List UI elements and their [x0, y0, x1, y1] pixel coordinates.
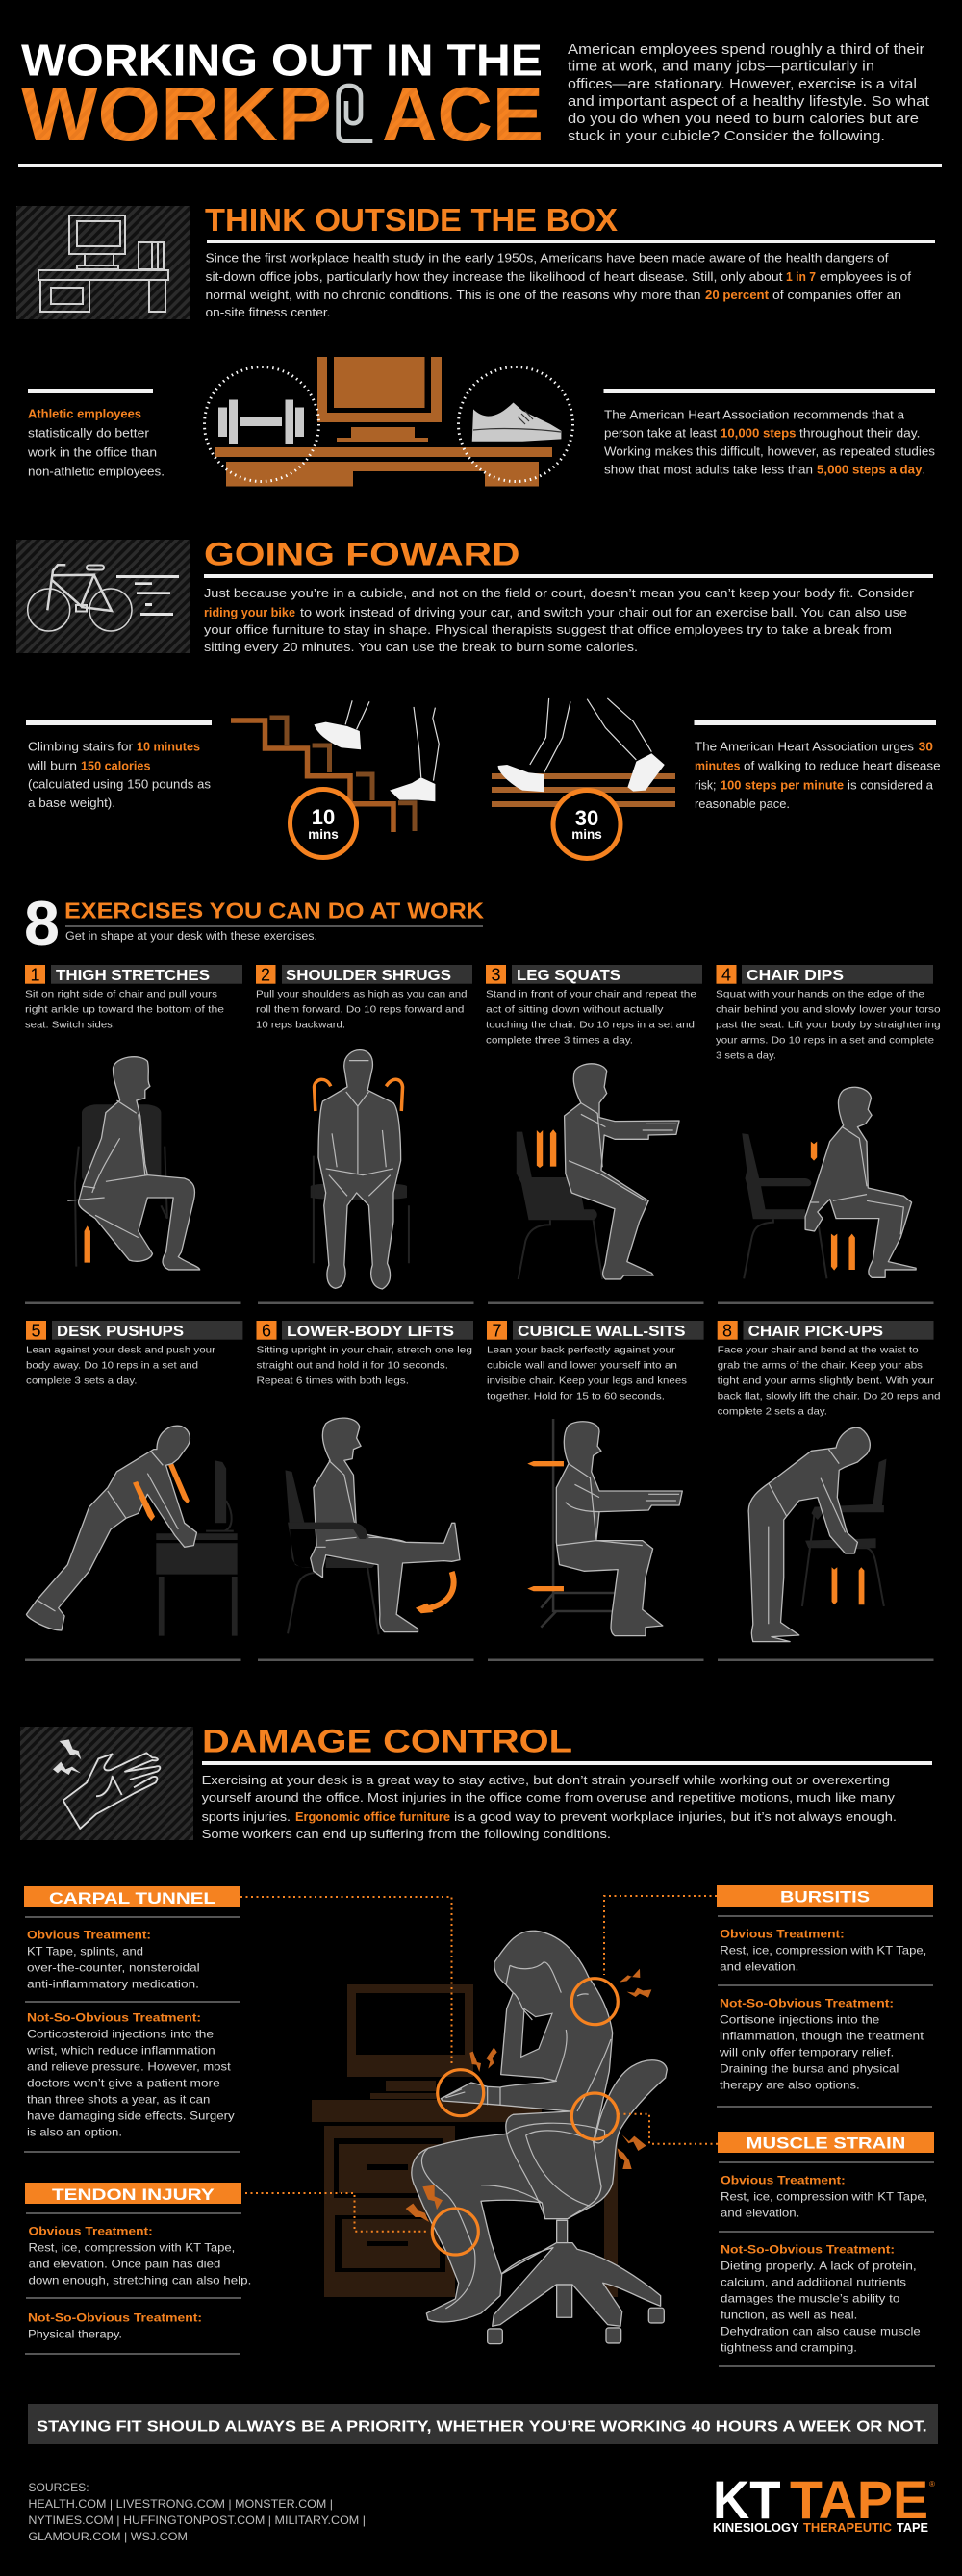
body text: Since the first workplace health study in the early 1950s, Americans have been made aware of the health dangers of — [206, 251, 889, 265]
callout: climbing stairs: 10 minutes — [137, 740, 200, 754]
exercise 5: desk pushups: body away. Do 10 reps in a set and — [26, 1360, 198, 1372]
callout: 10,000 steps: . — [922, 462, 925, 477]
badge: 30 mins: mins — [571, 827, 602, 842]
logo: KT Tape: THERAPEUTIC — [803, 2521, 892, 2535]
body text — [204, 586, 915, 654]
body text: Ergonomic office furniture — [295, 1809, 450, 1824]
panel: bursitis: Cortisone injections into the — [720, 2013, 880, 2027]
body text: yourself around the office. Most injuries in the office come from overuse and repetitive motions, much like many — [202, 1790, 896, 1805]
section: think outside the box — [16, 202, 935, 319]
panel: bursitis: Rest, ice, compression with KT Tape, — [720, 1944, 926, 1957]
sources: HEALTH.COM | LIVESTRONG.COM | MONSTER.COM | — [28, 2497, 333, 2511]
body text: your office furniture to stay in shape. Physical therapists suggest that office employees try to take a break from — [204, 622, 892, 637]
exercise 7: cubicle wall-sits: CUBICLE WALL-SITS — [518, 1324, 685, 1340]
icon: sneaker — [458, 367, 573, 481]
panel: tendon injury: down enough, stretching can also help. — [29, 2274, 251, 2287]
exercise 6: lower-body lifts: 6 — [262, 1322, 271, 1341]
body text: Some workers can end up suffering from the following conditions. — [202, 1827, 611, 1841]
callout: 10,000 steps: The American Heart Association recommends that a — [604, 408, 905, 422]
exercise 3: leg squats — [486, 965, 702, 1279]
panel: carpal tunnel: have damaging side effects. Surgery — [27, 2109, 235, 2123]
introduction paragraph: offices—are stationary. However, exercise is a vital — [568, 76, 917, 92]
figure: shoulder shrug — [311, 1050, 409, 1289]
chair back — [542, 2060, 667, 2219]
icon: office desk — [16, 206, 190, 319]
pain markers — [432, 1979, 618, 2255]
exercise 3: leg squats: touching the chair. Do 10 reps in a set and — [486, 1020, 695, 1031]
sources — [28, 2481, 366, 2543]
callout: 30 minutes of walking — [695, 720, 941, 811]
exercise 7: cubicle wall-sits: together. Hold for 15 to 60 seconds. — [487, 1391, 665, 1402]
callout: 30 minutes of walking: 100 steps per minute — [721, 778, 844, 793]
panel: muscle strain: Obvious Treatment: — [721, 2174, 846, 2187]
callout: 10,000 steps: Working makes this difficult, however, as repeated studies — [604, 444, 936, 458]
callout: 30 minutes of walking: 30 — [919, 740, 933, 754]
title line: working out in the: WORKING OUT IN THE — [21, 35, 543, 85]
body text: riding your bike — [204, 605, 295, 619]
body text: 1 in 7 — [786, 269, 816, 284]
chest gap — [521, 2008, 552, 2057]
panel: bursitis: BURSITIS — [780, 1888, 870, 1907]
section: damage control — [20, 1724, 932, 1841]
panel: carpal tunnel: Corticosteroid injections into the — [27, 2028, 214, 2041]
panel: tendon injury: Obvious Treatment: — [29, 2225, 153, 2238]
exercise 3: leg squats: 3 — [491, 966, 501, 985]
introduction paragraph: stuck in your cubicle? Consider the following. — [568, 128, 885, 144]
body text: normal weight, with no chronic conditions. This is one of the reasons why more than — [206, 288, 700, 302]
exercise 4: chair dips: 3 sets a day. — [716, 1050, 776, 1062]
figure: leg squat — [517, 1064, 679, 1279]
callout: 10,000 steps: person take at least — [604, 425, 717, 441]
callout: 10,000 steps: throughout their day. — [799, 425, 920, 441]
row divider — [25, 1658, 933, 1661]
callout: 10,000 steps: show that most adults take less than — [604, 462, 813, 477]
panel: bursitis: Obvious Treatment: — [720, 1928, 845, 1941]
title word: workplace with paperclip: ACE — [382, 71, 544, 157]
exercise 5: desk pushups: complete 3 sets a day. — [26, 1376, 137, 1387]
exercise 8: chair pick-ups: complete 2 sets a day. — [718, 1406, 827, 1418]
exercise 4: chair dips: chair behind you and slowly lower your torso — [716, 1004, 941, 1016]
introduction paragraph — [568, 41, 930, 144]
exercise 6: lower-body lifts — [256, 1321, 473, 1634]
panel: tendon injury — [25, 2183, 251, 2355]
callout: athletic employees — [27, 389, 165, 479]
callout: climbing stairs: Climbing stairs for — [28, 740, 134, 754]
illustration: desk and woman in pain — [240, 1896, 718, 2344]
body text: sports injuries. — [202, 1809, 291, 1824]
introduction paragraph: time at work, and many jobs—particularly in — [568, 59, 874, 75]
legs and shoes — [498, 698, 665, 792]
callout: climbing stairs: 150 calories — [81, 759, 150, 773]
body text: on-site fitness center. — [206, 305, 331, 319]
figure: wall sit — [527, 1419, 682, 1636]
callout: athletic employees: work in the office than — [27, 444, 157, 460]
exercise 4: chair dips: past the seat. Lift your body by straightening — [716, 1020, 941, 1031]
exercise 3: leg squats: complete three 3 times a day. — [486, 1035, 633, 1047]
icon: dumbbell — [204, 367, 319, 481]
panel: muscle strain: and elevation. — [721, 2207, 799, 2220]
badge: 10 mins: mins — [308, 827, 339, 842]
callout: 10,000 steps — [604, 389, 936, 477]
callout: 10,000 steps: 5,000 steps a day — [817, 462, 923, 477]
panel: muscle strain: Not-So-Obvious Treatment: — [721, 2243, 895, 2257]
introduction paragraph: do you do when you need to burn calories but are — [568, 111, 919, 127]
panel: carpal tunnel: than three shots a year, as it can — [27, 2093, 210, 2107]
subtitle: Get in shape at your desk with these exercises. — [65, 931, 317, 943]
illustration: stair climbing — [231, 700, 439, 858]
sources: SOURCES: — [28, 2481, 89, 2494]
exercise 8: chair pick-ups: back flat, slowly lift the chair. Do 20 reps and — [718, 1391, 941, 1402]
drawer handles — [367, 2164, 408, 2246]
panel: muscle strain: function, as well as heal. — [721, 2309, 857, 2322]
callout: 10,000 steps: 10,000 steps — [721, 425, 797, 441]
figure: leg lift — [285, 1418, 460, 1634]
body text: Just because you’re in a cubicle, and not on the field or court, doesn’t mean you can’t keep your body fit. Consider — [204, 586, 915, 600]
panel: bursitis: inflammation, though the treatment — [720, 2030, 924, 2043]
woman figure — [412, 1931, 613, 2322]
logo: KT Tape: TAPE — [790, 2469, 928, 2530]
panel: tendon injury: Not-So-Obvious Treatment: — [28, 2311, 202, 2325]
exercise 5: desk pushups: 5 — [31, 1322, 41, 1341]
exercise 7: cubicle wall-sits: 7 — [492, 1322, 502, 1341]
exercise 4: chair dips: your arms. Do 10 reps in a set and complete — [716, 1035, 934, 1047]
callout: athletic employees: Athletic employees — [28, 407, 141, 421]
exercise 8: chair pick-ups: Face your chair and bend at the waist to — [718, 1345, 919, 1356]
callout: climbing stairs — [26, 720, 212, 810]
exercise 8: chair pick-ups — [718, 1321, 941, 1642]
legs and shoes — [315, 700, 439, 801]
exercise 7: cubicle wall-sits — [487, 1321, 704, 1636]
closing banner — [28, 2404, 938, 2444]
callout: 30 minutes of walking: reasonable pace. — [695, 796, 790, 811]
exercise 5: desk pushups — [26, 1321, 242, 1636]
exercise 7: cubicle wall-sits: invisible chair. Keep your legs and knees — [487, 1376, 687, 1387]
body text — [206, 251, 911, 319]
panel: tendon injury: Rest, ice, compression with KT Tape, — [29, 2241, 235, 2255]
panel: bursitis: will only offer temporary relief. — [719, 2046, 894, 2059]
figure: thigh stretch — [67, 1057, 200, 1270]
chair base — [488, 2220, 664, 2344]
panel: tendon injury: TENDON INJURY — [52, 2185, 215, 2204]
exercise 6: lower-body lifts: Sitting upright in your chair, stretch one leg — [256, 1345, 472, 1356]
panel: muscle strain: tightness and cramping. — [721, 2341, 857, 2355]
panel: carpal tunnel: over-the-counter, nonsteroidal — [27, 1961, 200, 1975]
panel: carpal tunnel: Not-So-Obvious Treatment: — [27, 2010, 201, 2024]
badge: 10 mins: 10 — [312, 805, 335, 829]
body text: sit-down office jobs, particularly how they increase the likelihood of heart disease. Still, only about — [206, 269, 783, 284]
panel: carpal tunnel: is also an option. — [27, 2126, 122, 2139]
closing banner: STAYING FIT SHOULD ALWAYS BE A PRIORITY, WHETHER YOU’RE WORKING 40 HOURS A WEEK OR NOT. — [37, 2418, 927, 2435]
panel: muscle strain: damages the muscle’s ability to — [721, 2292, 900, 2306]
panel: carpal tunnel: anti-inflammatory medication. — [27, 1978, 199, 1991]
panel: bursitis: Draining the bursa and physical — [720, 2062, 899, 2076]
exercise 3: leg squats: act of sitting down without actually — [486, 1004, 664, 1016]
badge: 10 mins — [291, 789, 356, 858]
floor stripes — [492, 773, 675, 807]
callout: athletic employees: non-athletic employees. — [28, 464, 165, 479]
exercise 1: thigh stretches: seat. Switch sides. — [25, 1020, 115, 1031]
desk and monitor — [215, 357, 552, 487]
callout: 30 minutes of walking: risk; — [695, 778, 716, 793]
panel: muscle strain — [718, 2132, 935, 2367]
sources: NYTIMES.COM | HUFFINGTONPOST.COM | MILITARY.COM | — [28, 2513, 366, 2527]
callout: 30 minutes of walking: of walking to reduce heart disease — [744, 759, 941, 773]
body text: Exercising at your desk is a great way to stay active, but don’t strain yourself while working out or overexerting — [202, 1773, 890, 1787]
panel: muscle strain: MUSCLE STRAIN — [747, 2134, 905, 2153]
panel: carpal tunnel: CARPAL TUNNEL — [49, 1889, 215, 1907]
exercise 6: lower-body lifts: straight out and hold it for 10 seconds. — [256, 1360, 448, 1372]
exercise 2: shoulder shrugs: Pull your shoulders as high as you can and — [256, 989, 468, 1000]
exercise 2: shoulder shrugs — [256, 965, 472, 1289]
panel: carpal tunnel: wrist, which reduce inflammation — [26, 2044, 215, 2058]
figure: desk pushup — [26, 1426, 238, 1636]
panel: bursitis: Not-So-Obvious Treatment: — [720, 1997, 894, 2010]
panel: carpal tunnel: KT Tape, splints, and — [27, 1944, 143, 1957]
figure inner lines — [421, 1962, 611, 2309]
panel: tendon injury: and elevation. Once pain has died — [29, 2258, 220, 2271]
badge: 30 mins — [553, 791, 620, 858]
introduction paragraph: and important aspect of a healthy lifestyle. So what — [568, 93, 930, 110]
title word: workplace with paperclip: WORKP — [21, 71, 332, 157]
callout: climbing stairs: will burn — [27, 759, 77, 773]
exercise 2: shoulder shrugs: 2 — [261, 966, 270, 985]
exercise 1: thigh stretches: 1 — [30, 966, 40, 985]
body text: to work instead of driving your car, and switch your chair out for an exercise ball. You can also use — [300, 605, 907, 619]
large numeral 8: 8 — [24, 888, 60, 958]
desk, monitor and drawers — [312, 1984, 618, 2297]
exercise 2: shoulder shrugs: 10 reps backward. — [256, 1020, 345, 1031]
callout: 30 minutes of walking: minutes — [695, 759, 741, 773]
callout: climbing stairs: a base weight). — [28, 796, 115, 810]
exercise 8: chair pick-ups: tight and your arms slightly bent. With your — [718, 1376, 935, 1387]
dotted leader lines — [240, 1896, 718, 2232]
section: going foward — [16, 537, 933, 654]
panel: carpal tunnel — [24, 1886, 240, 2153]
exercise 4: chair dips: 4 — [722, 966, 731, 985]
figure: chair dip — [742, 1087, 916, 1278]
exercise 4: chair dips: Squat with your hands on the edge of the — [716, 989, 924, 1000]
panel: bursitis: and elevation. — [720, 1960, 798, 1974]
exercise 1: thigh stretches: THIGH STRETCHES — [56, 968, 210, 984]
header: title and introduction — [21, 35, 930, 157]
illustration: desk with dumbbell and sneaker — [204, 357, 573, 487]
callout: 30 minutes of walking: The American Heart Association urges — [695, 740, 915, 754]
exercise 1: thigh stretches — [25, 965, 242, 1270]
title word: workplace with paperclip — [21, 71, 544, 157]
exercise 7: cubicle wall-sits: cubicle wall and lower yourself into an — [487, 1360, 677, 1372]
icon: bicycle — [16, 540, 190, 653]
body text: is a good way to prevent workplace injuries, but it’s not always enough. — [454, 1809, 897, 1824]
badge: 30 mins: 30 — [575, 806, 598, 830]
panel: carpal tunnel: Obvious Treatment: — [27, 1929, 151, 1942]
body text: sitting every 20 minutes. You can use the break to burn some calories. — [204, 640, 638, 654]
body text: 20 percent — [705, 288, 770, 302]
introduction paragraph: American employees spend roughly a third of their — [568, 41, 924, 58]
logo: KT Tape: ® — [929, 2480, 935, 2488]
woman on office chair — [412, 1931, 667, 2344]
heading text: EXERCISES YOU CAN DO AT WORK — [64, 898, 484, 923]
icon: painful hand — [20, 1727, 193, 1840]
body text: employees is of — [820, 269, 911, 284]
logo: KT Tape: KINESIOLOGY — [713, 2521, 799, 2535]
heading: GOING FOWARD — [204, 537, 519, 573]
callout: athletic employees: statistically do better — [28, 425, 150, 441]
panel: muscle strain: Dieting properly. A lack of protein, — [721, 2260, 917, 2273]
stairs — [231, 718, 415, 832]
body text: of companies offer an — [772, 288, 901, 302]
pain bolts — [406, 1969, 651, 2222]
section heading: 8 exercises — [24, 888, 484, 958]
exercise 4: chair dips — [716, 965, 941, 1278]
panel: bursitis — [717, 1885, 933, 2108]
exercise 6: lower-body lifts: LOWER-BODY LIFTS — [287, 1324, 454, 1340]
exercise 3: leg squats: Stand in front of your chair and repeat the — [486, 989, 696, 1000]
panel: carpal tunnel: and relieve pressure. However, most — [27, 2060, 231, 2074]
illustration: walking — [492, 698, 675, 858]
exercise 2: shoulder shrugs: SHOULDER SHRUGS — [286, 968, 451, 984]
logo: KT Tape — [713, 2469, 935, 2535]
row divider — [25, 1302, 933, 1304]
heading: DAMAGE CONTROL — [202, 1724, 572, 1760]
exercise 1: thigh stretches: Sit on right side of chair and pull yours — [25, 989, 217, 1000]
figure: chair pick-up — [748, 1427, 886, 1642]
exercise 2: shoulder shrugs: roll them forward. Do 10 reps forward and — [256, 1004, 465, 1016]
panel: carpal tunnel: doctors won’t give a patient more — [27, 2077, 220, 2090]
callout: climbing stairs: (calculated using 150 pounds as — [28, 777, 212, 792]
heading: THINK OUTSIDE THE BOX — [205, 202, 618, 238]
exercise 8: chair pick-ups: grab the arms of the chair. Keep your abs — [718, 1360, 923, 1372]
exercise 4: chair dips: CHAIR DIPS — [747, 968, 844, 984]
exercise 5: desk pushups: Lean against your desk and push your — [26, 1345, 216, 1356]
panel: muscle strain: Rest, ice, compression with KT Tape, — [721, 2190, 927, 2204]
panel: bursitis: therapy are also options. — [720, 2079, 860, 2092]
panel: tendon injury: Physical therapy. — [28, 2328, 122, 2341]
panel: muscle strain: calcium, and additional nutrients — [721, 2276, 906, 2289]
logo: KT Tape: KT — [713, 2469, 781, 2530]
panel: muscle strain: Dehydration can also cause muscle — [721, 2325, 921, 2338]
logo: KT Tape: TAPE — [897, 2521, 928, 2535]
exercise 3: leg squats: LEG SQUATS — [517, 968, 620, 984]
exercise 6: lower-body lifts: Repeat 6 times with both legs. — [256, 1376, 409, 1387]
exercise 8: chair pick-ups: CHAIR PICK-UPS — [748, 1324, 883, 1340]
callout: 30 minutes of walking: is considered a — [848, 778, 934, 793]
body text — [202, 1773, 897, 1841]
exercise 1: thigh stretches: right ankle up toward the bottom of the — [25, 1004, 224, 1016]
exercise 7: cubicle wall-sits: Lean your back perfectly against your — [487, 1345, 676, 1356]
exercise 5: desk pushups: DESK PUSHUPS — [57, 1324, 184, 1340]
exercise 8: chair pick-ups: 8 — [722, 1322, 732, 1341]
sources: GLAMOUR.COM | WSJ.COM — [28, 2530, 188, 2543]
